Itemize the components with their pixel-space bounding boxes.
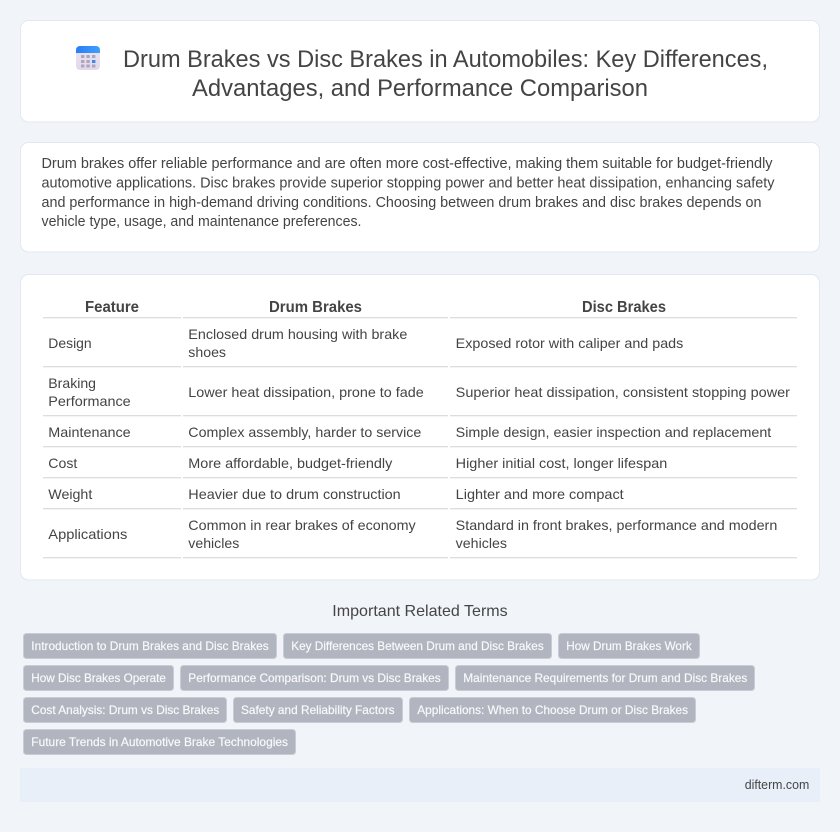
- table row: weight: Heavier due to drum construction: [188, 486, 401, 502]
- description text: vehicle type, usage, and maintenance preferences.: [42, 214, 362, 230]
- tag: how drum brakes work: [558, 634, 700, 658]
- table row: maintenance: Complex assembly, harder to service: [188, 424, 422, 440]
- table row: weight: Weight: [48, 486, 92, 502]
- table row: cost: Cost: [48, 455, 77, 471]
- table header row: [43, 299, 797, 318]
- table row: design: Design: [48, 335, 92, 351]
- table row: cost: [43, 455, 797, 478]
- table row: braking performance: Lower heat dissipation, prone to fade: [188, 384, 424, 400]
- tag: key differences: Key Differences Between Drum and Disc Brakes: [291, 639, 544, 653]
- tag: how drum brakes work: How Drum Brakes Work: [566, 639, 693, 653]
- table row: weight: [43, 486, 797, 509]
- table row: design: Enclosed drum housing with brake: [188, 326, 408, 342]
- heading: important related terms: Important Related Terms: [332, 603, 508, 620]
- title: Drum Brakes vs Disc Brakes in Automobiles: Key Differences,: [123, 46, 768, 73]
- table row: design: shoes: [188, 344, 226, 360]
- description text: automotive applications. Disc brakes provide superior stopping power and better heat dissipation, enhancing safety: [42, 175, 775, 191]
- tag: performance comparison: Performance Comparison: Drum vs Disc Brakes: [188, 671, 441, 685]
- tag: cost analysis: [24, 698, 226, 722]
- tag: safety and reliability: Safety and Reliability Factors: [241, 703, 395, 717]
- tag: maintenance requirements: [456, 666, 754, 690]
- tag: future trends: [24, 730, 296, 754]
- table row: cost: More affordable, budget-friendly: [188, 455, 392, 471]
- table row: braking performance: Superior heat dissipation, consistent stopping power: [456, 384, 790, 400]
- tag: applications: Applications: When to Choose Drum or Disc Brakes: [417, 703, 688, 717]
- table row: maintenance: [43, 424, 797, 447]
- table row: applications: Common in rear brakes of economy: [188, 517, 416, 533]
- table row: braking performance: [43, 375, 797, 416]
- table row: applications: [43, 517, 797, 558]
- table row: applications: vehicles: [456, 535, 507, 551]
- table row: applications: Applications: [48, 526, 127, 542]
- table row: design: Exposed rotor with caliper and pads: [456, 335, 683, 351]
- description text: [42, 156, 775, 230]
- table row: maintenance: Maintenance: [48, 424, 131, 440]
- tag: introduction: [24, 634, 276, 658]
- footer source text: difterm.com: [745, 777, 809, 792]
- table row: applications: Standard in front brakes, performance and modern: [456, 517, 777, 533]
- table row: design: [43, 326, 797, 367]
- panel: description: [20, 142, 820, 252]
- table header row: Drum Brakes: [269, 299, 362, 316]
- tag: maintenance requirements: Maintenance Requirements for Drum and Disc Brakes: [463, 671, 747, 685]
- panel: comparison table: [20, 274, 820, 580]
- tag: future trends: Future Trends in Automotive Brake Technologies: [31, 735, 288, 749]
- table header row: Disc Brakes: [582, 299, 666, 316]
- table row: braking performance: Braking: [48, 375, 96, 391]
- tag: key differences: [284, 634, 552, 658]
- icon: calendar: [76, 46, 100, 70]
- table row: weight: Lighter and more compact: [456, 486, 624, 502]
- panel: header: [20, 20, 820, 122]
- table row: cost: Higher initial cost, longer lifespan: [456, 455, 667, 471]
- title: Advantages, and Performance Comparison: [192, 75, 648, 102]
- tag: performance comparison: [180, 666, 448, 690]
- tag: cost analysis: Cost Analysis: Drum vs Disc Brakes: [31, 703, 219, 717]
- table row: maintenance: Simple design, easier inspection and replacement: [456, 424, 771, 440]
- tag: how disc brakes operate: [24, 666, 174, 690]
- table header row: Feature: [85, 299, 139, 316]
- table row: applications: vehicles: [188, 535, 239, 551]
- tag: safety and reliability: [234, 698, 402, 722]
- description text: Drum brakes offer reliable performance and are often more cost-effective, making them suitable for budget-friendly: [42, 156, 773, 172]
- footer: [20, 768, 820, 802]
- title: [123, 46, 768, 102]
- tag: introduction: Introduction to Drum Brakes and Disc Brakes: [31, 639, 269, 653]
- tag: how disc brakes operate: How Disc Brakes Operate: [31, 671, 166, 685]
- table row: braking performance: Performance: [48, 393, 131, 409]
- description text: and performance in high-demand driving conditions. Choosing between drum brakes and disc brakes depends on: [42, 195, 762, 211]
- tag group: related terms: [24, 634, 754, 754]
- tag: applications: [410, 698, 696, 722]
